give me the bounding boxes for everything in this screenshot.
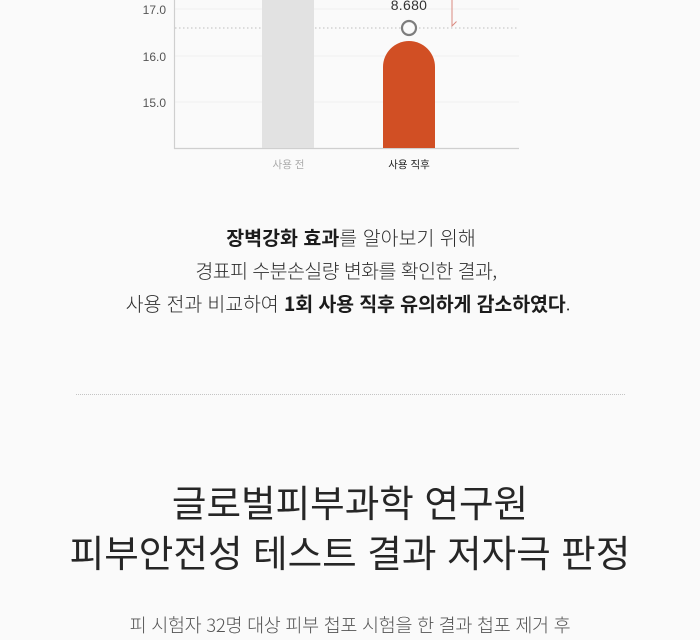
marker [402, 21, 416, 35]
y axis labels: 16.0 [143, 50, 166, 64]
dotted divider [76, 394, 625, 395]
bar chart [143, 0, 519, 171]
description text [126, 222, 570, 317]
y axis labels [143, 3, 166, 110]
section heading: 글로벌피부과학 연구원 [172, 473, 528, 528]
x axis label: before: 사용 전 [273, 159, 304, 171]
description text: 장벽강화 효과를 알아보기 위해 [226, 222, 476, 251]
description text: 경표피 수분손실량 변화를 확인한 결과, [195, 255, 497, 284]
bar: right after use [383, 41, 435, 148]
y axis labels: 17.0 [143, 3, 166, 17]
x axis label: after: 사용 직후 [388, 159, 430, 171]
axis [174, 0, 519, 148]
section heading [70, 473, 630, 578]
y axis labels: 15.0 [143, 96, 166, 110]
intro paragraph: 피 시험자 32명 대상 피부 첩포 시험을 한 결과 첩포 제거 후 [130, 612, 570, 638]
section heading: 피부안전성 테스트 결과 저자극 판정 [70, 523, 630, 578]
arrow [452, 0, 456, 26]
description text: 사용 전과 비교하여 1회 사용 직후 유의하게 감소하였다. [126, 288, 570, 317]
bar: before use [262, 0, 314, 148]
